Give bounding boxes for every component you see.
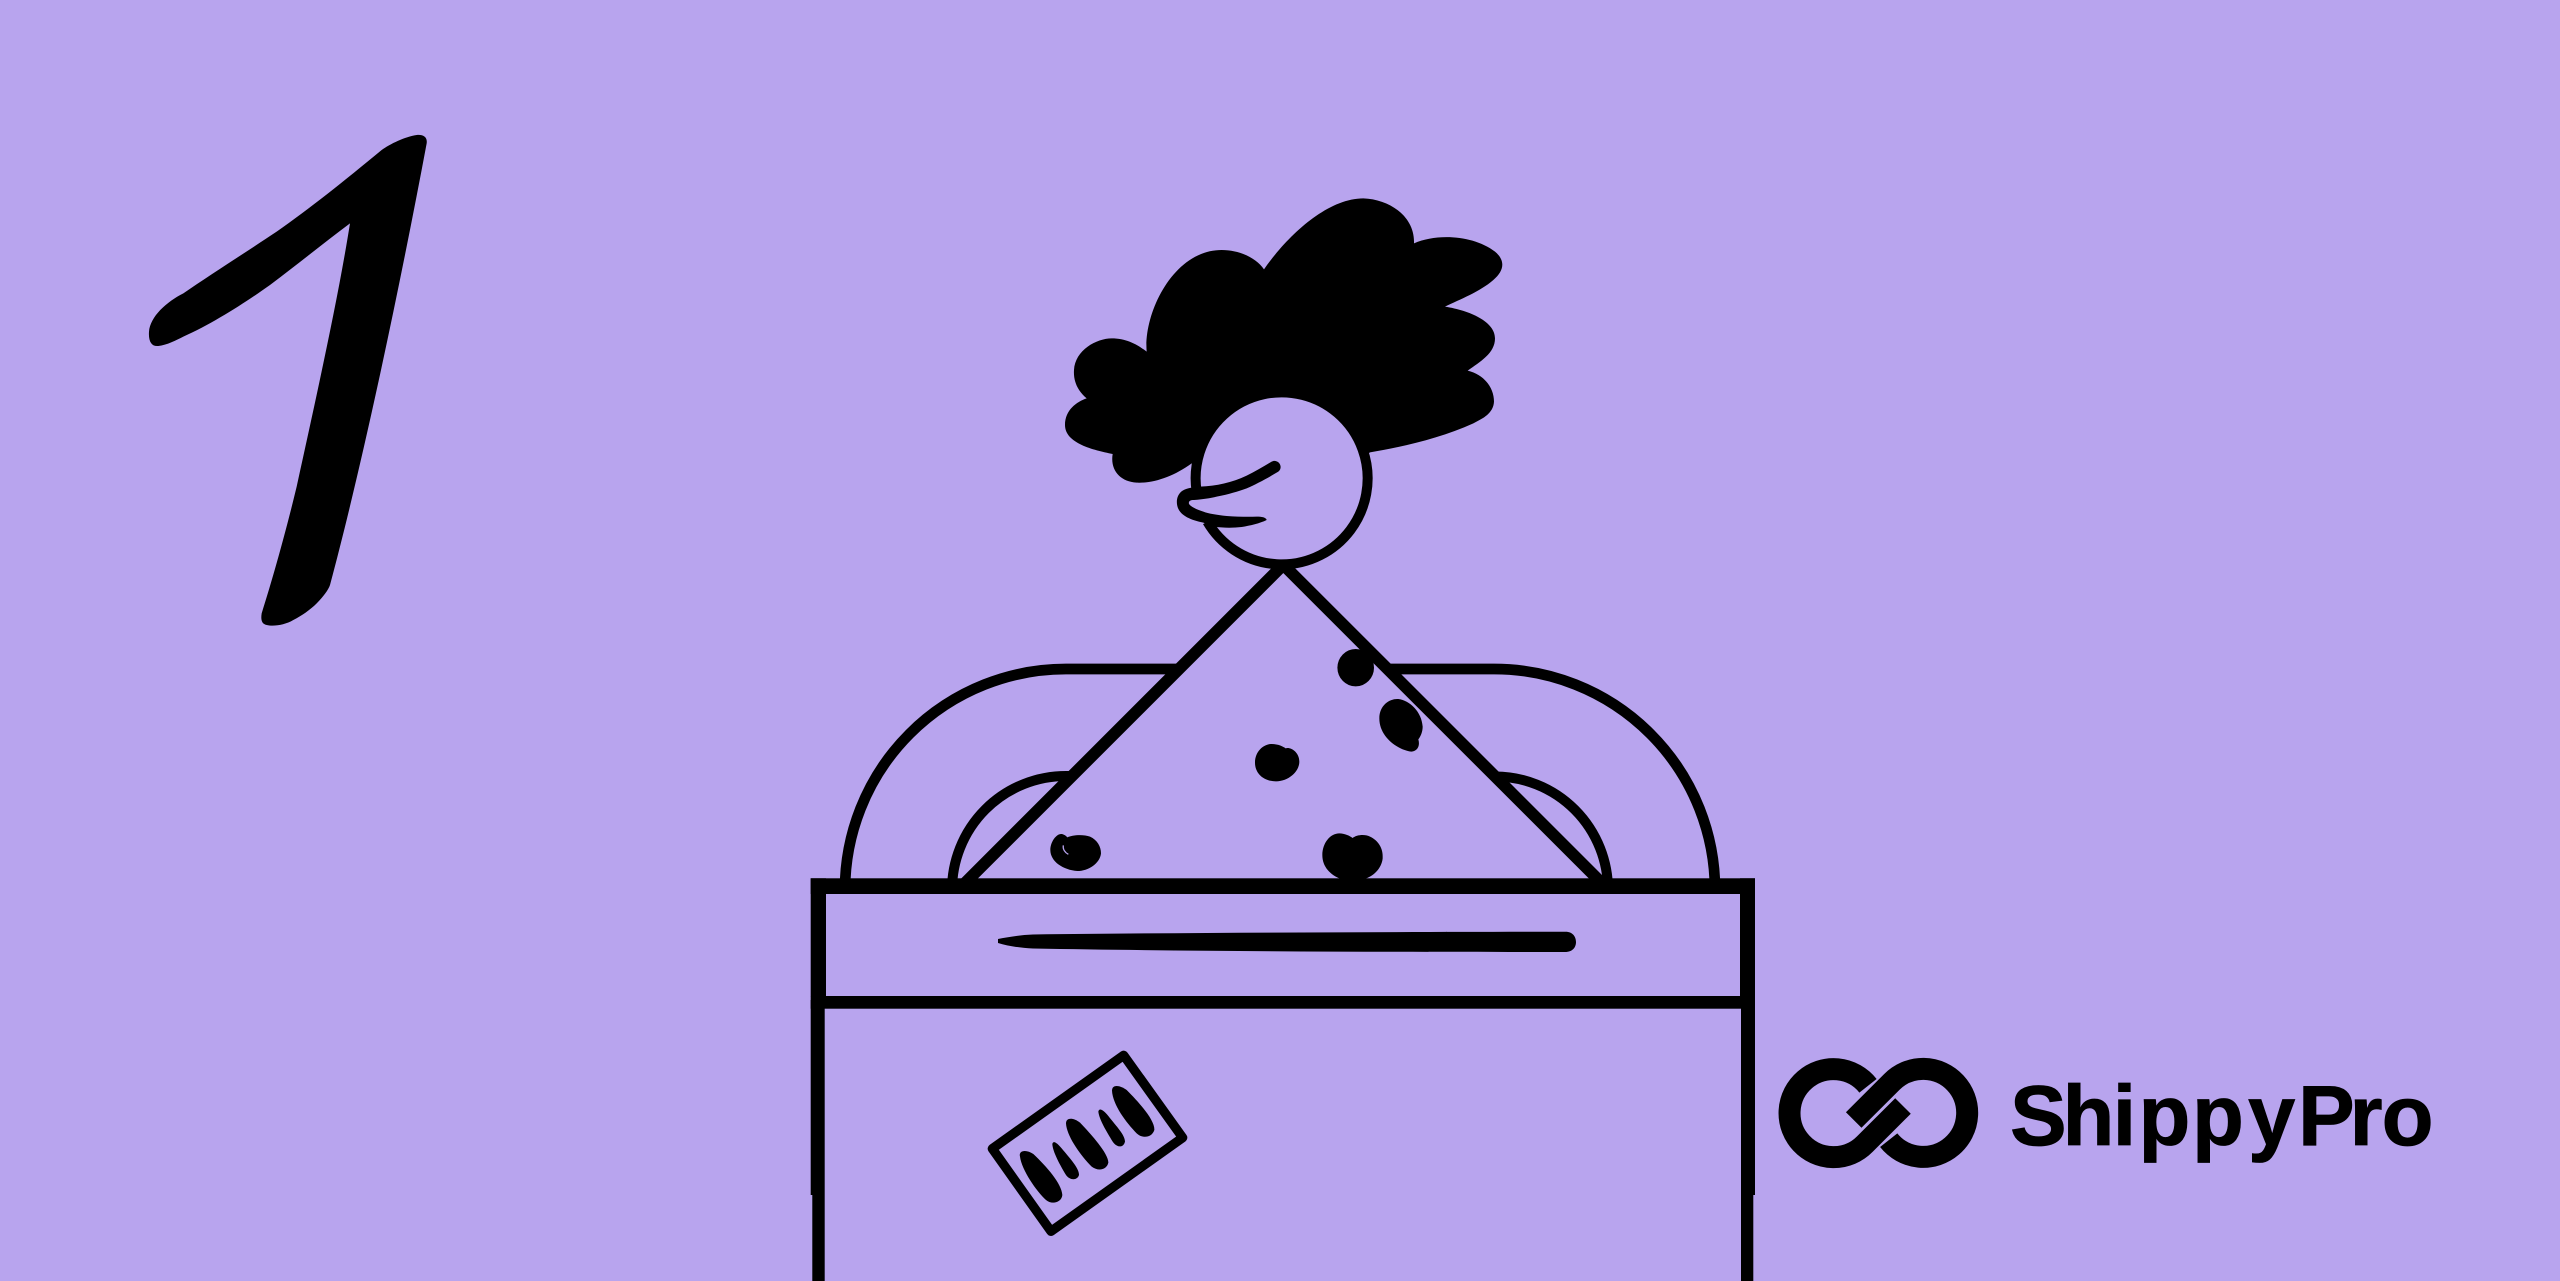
body spot lower left [1050,834,1101,871]
step number 1 (hand-drawn numeral) [149,135,427,626]
box lower right wall [1741,1000,1755,1281]
box upper right wall [1740,878,1755,996]
body spot right [1379,699,1423,752]
outer shoulder arch [845,669,1715,892]
box slot [998,932,1576,952]
body spot top [1337,649,1374,686]
ShippyPro logo [1790,1069,2434,1164]
box divider [811,996,1755,1009]
box [811,878,1755,1281]
body spot centre [1255,744,1299,781]
head [1177,392,1368,564]
triangular body [963,565,1604,885]
hair [1065,198,1502,513]
inner arm arches [952,776,1608,892]
body spot lower right [1322,833,1383,879]
nose and mouth stroke [1177,461,1281,528]
box top bar [811,878,1755,894]
box lower left wall [811,1000,825,1281]
character illustration [845,198,1715,892]
shipping label on box [992,1055,1183,1231]
logo mark: linked rings [1790,1069,1967,1157]
logo wordmark: ShippyPro [2010,1069,2434,1164]
box upper left wall [811,878,826,996]
